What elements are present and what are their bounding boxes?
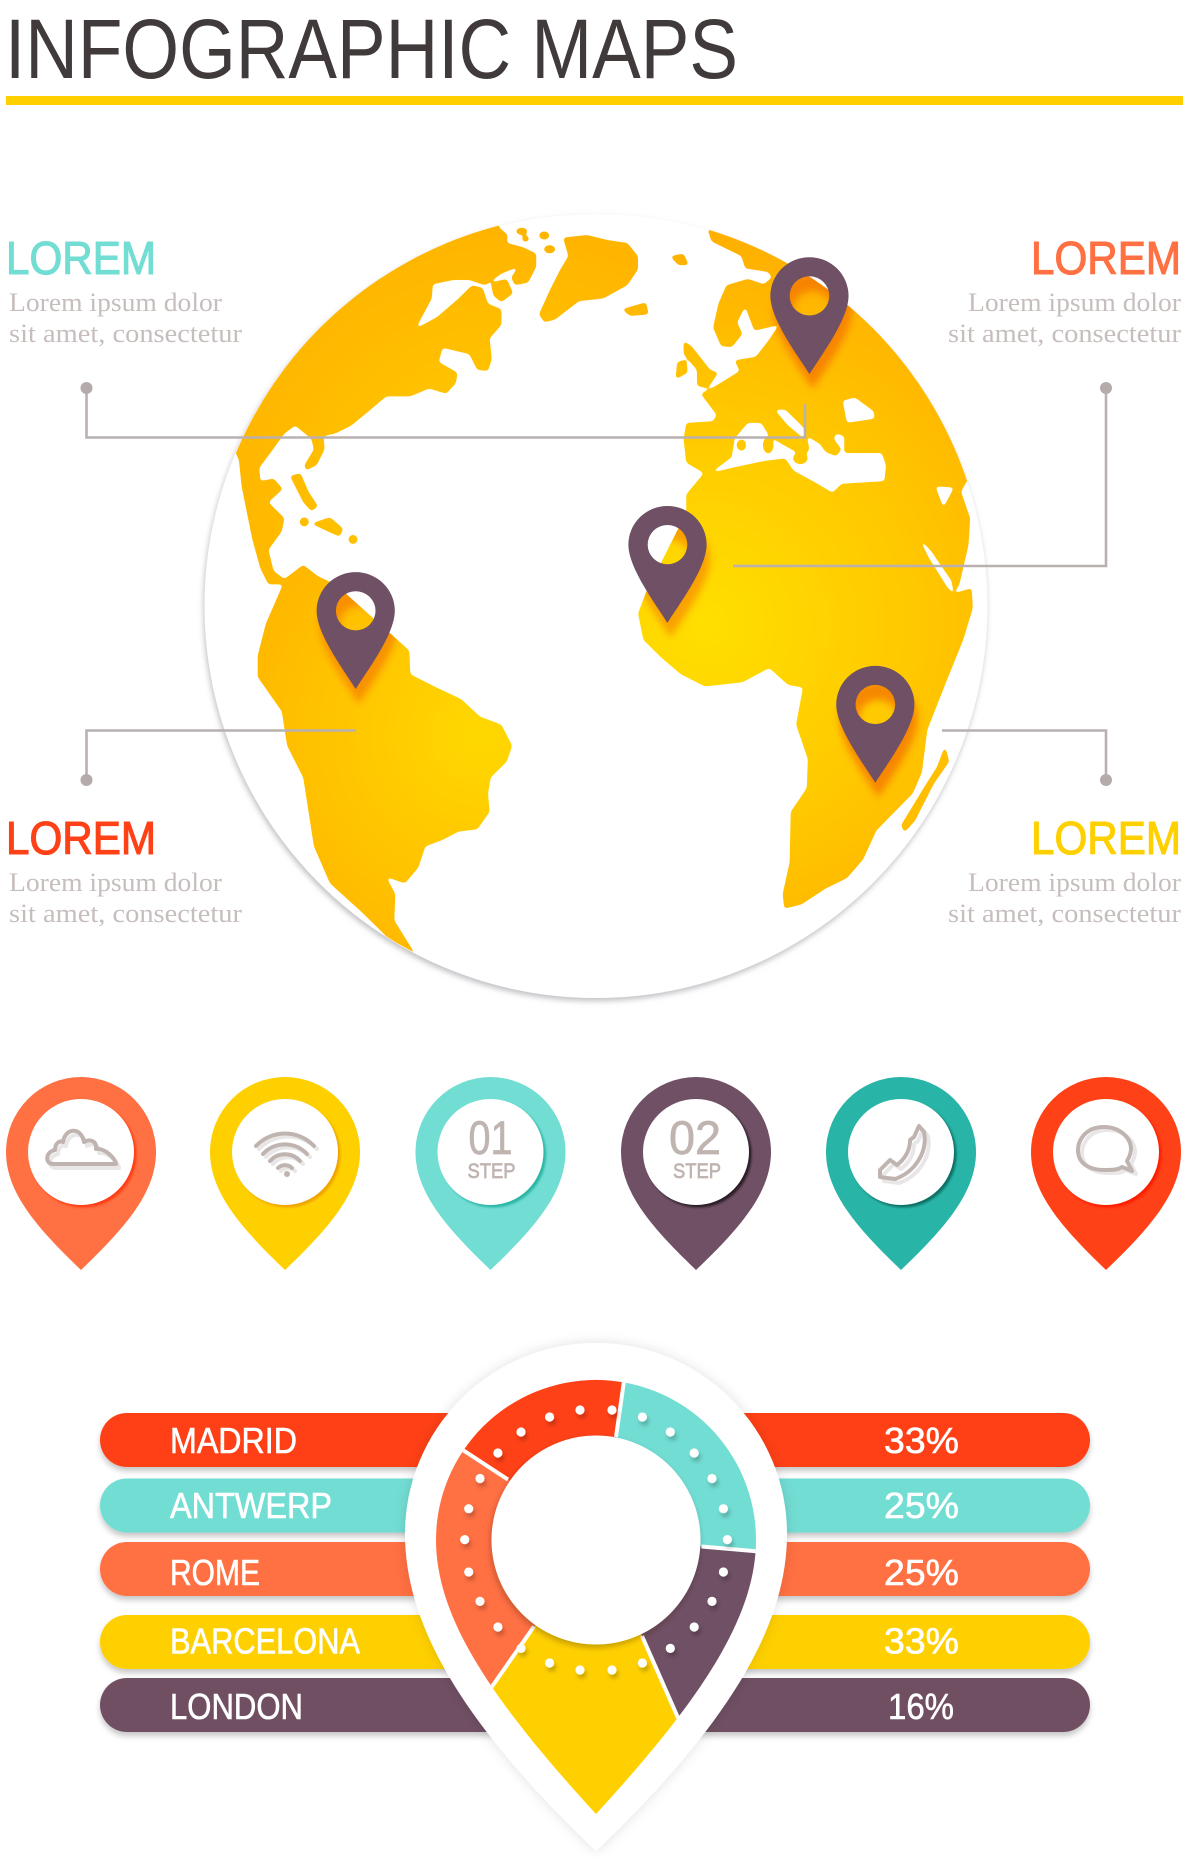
bar: Madrid <box>100 1413 1090 1467</box>
connector: bottom left <box>80 730 356 786</box>
icon pin: step 02: STEP <box>673 1160 721 1183</box>
pin: South America <box>317 572 395 689</box>
callout: bottom right: sit amet, consectetur <box>948 899 1181 928</box>
title: INFOGRAPHIC MAPS <box>5 2 738 96</box>
ring dots <box>460 1405 732 1675</box>
continents <box>236 226 973 952</box>
bar: London: LONDON <box>170 1686 303 1727</box>
icon pin: step 01: STEP <box>468 1160 516 1183</box>
icon pin: step 02 <box>621 1077 771 1270</box>
callout: top right: LOREM <box>1031 232 1181 284</box>
map pins <box>317 257 914 783</box>
callout: top left: Lorem ipsum dolor <box>9 288 222 317</box>
bar: Antwerp: ANTWERP <box>170 1485 332 1526</box>
large pie pin <box>400 1343 800 1851</box>
title <box>5 2 1183 105</box>
callout: bottom right <box>948 812 1181 928</box>
callout: top right <box>948 232 1181 348</box>
callout: bottom right: LOREM <box>1031 812 1181 864</box>
callout: bottom left: LOREM <box>6 812 156 864</box>
bar: Rome <box>100 1542 1090 1596</box>
pin row <box>6 1077 1181 1270</box>
bar: Madrid: 33% <box>884 1420 959 1461</box>
center hole <box>492 1436 700 1644</box>
bar: Rome: 25% <box>884 1552 959 1593</box>
bar: Rome: ROME <box>170 1552 260 1593</box>
icon pin: cloud <box>6 1077 156 1270</box>
icon pin: step 01 <box>416 1077 566 1270</box>
globe disc <box>204 214 988 998</box>
bar: Antwerp: 25% <box>884 1485 959 1526</box>
pin shadows <box>320 272 918 798</box>
icon pin: wifi <box>210 1077 360 1270</box>
pin: West Africa <box>628 506 707 623</box>
callout: top left: LOREM <box>6 232 156 284</box>
callout: top right: sit amet, consectetur <box>948 319 1181 348</box>
callout: bottom right: Lorem ipsum dolor <box>968 868 1181 897</box>
connector: bottom right <box>942 730 1112 786</box>
icon pin: step 02: 02 <box>669 1111 721 1164</box>
icon pin: speech bubble <box>1031 1077 1181 1270</box>
pin: Europe <box>770 257 849 374</box>
pie segments <box>436 1380 756 1814</box>
bar: Barcelona <box>100 1615 1090 1669</box>
callout: top right: Lorem ipsum dolor <box>968 288 1181 317</box>
bar: Antwerp <box>100 1478 1090 1532</box>
bar: London <box>100 1678 1090 1732</box>
icon pin: phone <box>826 1077 976 1270</box>
callout: top left: sit amet, consectetur <box>9 319 242 348</box>
callout: bottom left <box>6 812 242 928</box>
icon pin: step 01: 01 <box>468 1111 512 1164</box>
bar: Barcelona: 33% <box>884 1620 959 1662</box>
connector: top left <box>80 382 805 438</box>
bars chart <box>100 1413 1090 1732</box>
bar: Madrid: MADRID <box>170 1420 297 1461</box>
callout: top left <box>6 232 242 348</box>
bar: London: 16% <box>888 1686 954 1727</box>
pin outline <box>405 1343 787 1851</box>
callout: bottom left: Lorem ipsum dolor <box>9 868 222 897</box>
globe map <box>80 211 1112 998</box>
pin: East Africa <box>836 666 914 783</box>
callout: bottom left: sit amet, consectetur <box>9 899 242 928</box>
bar: Barcelona: BARCELONA <box>170 1620 360 1662</box>
connector: top right <box>733 382 1112 566</box>
